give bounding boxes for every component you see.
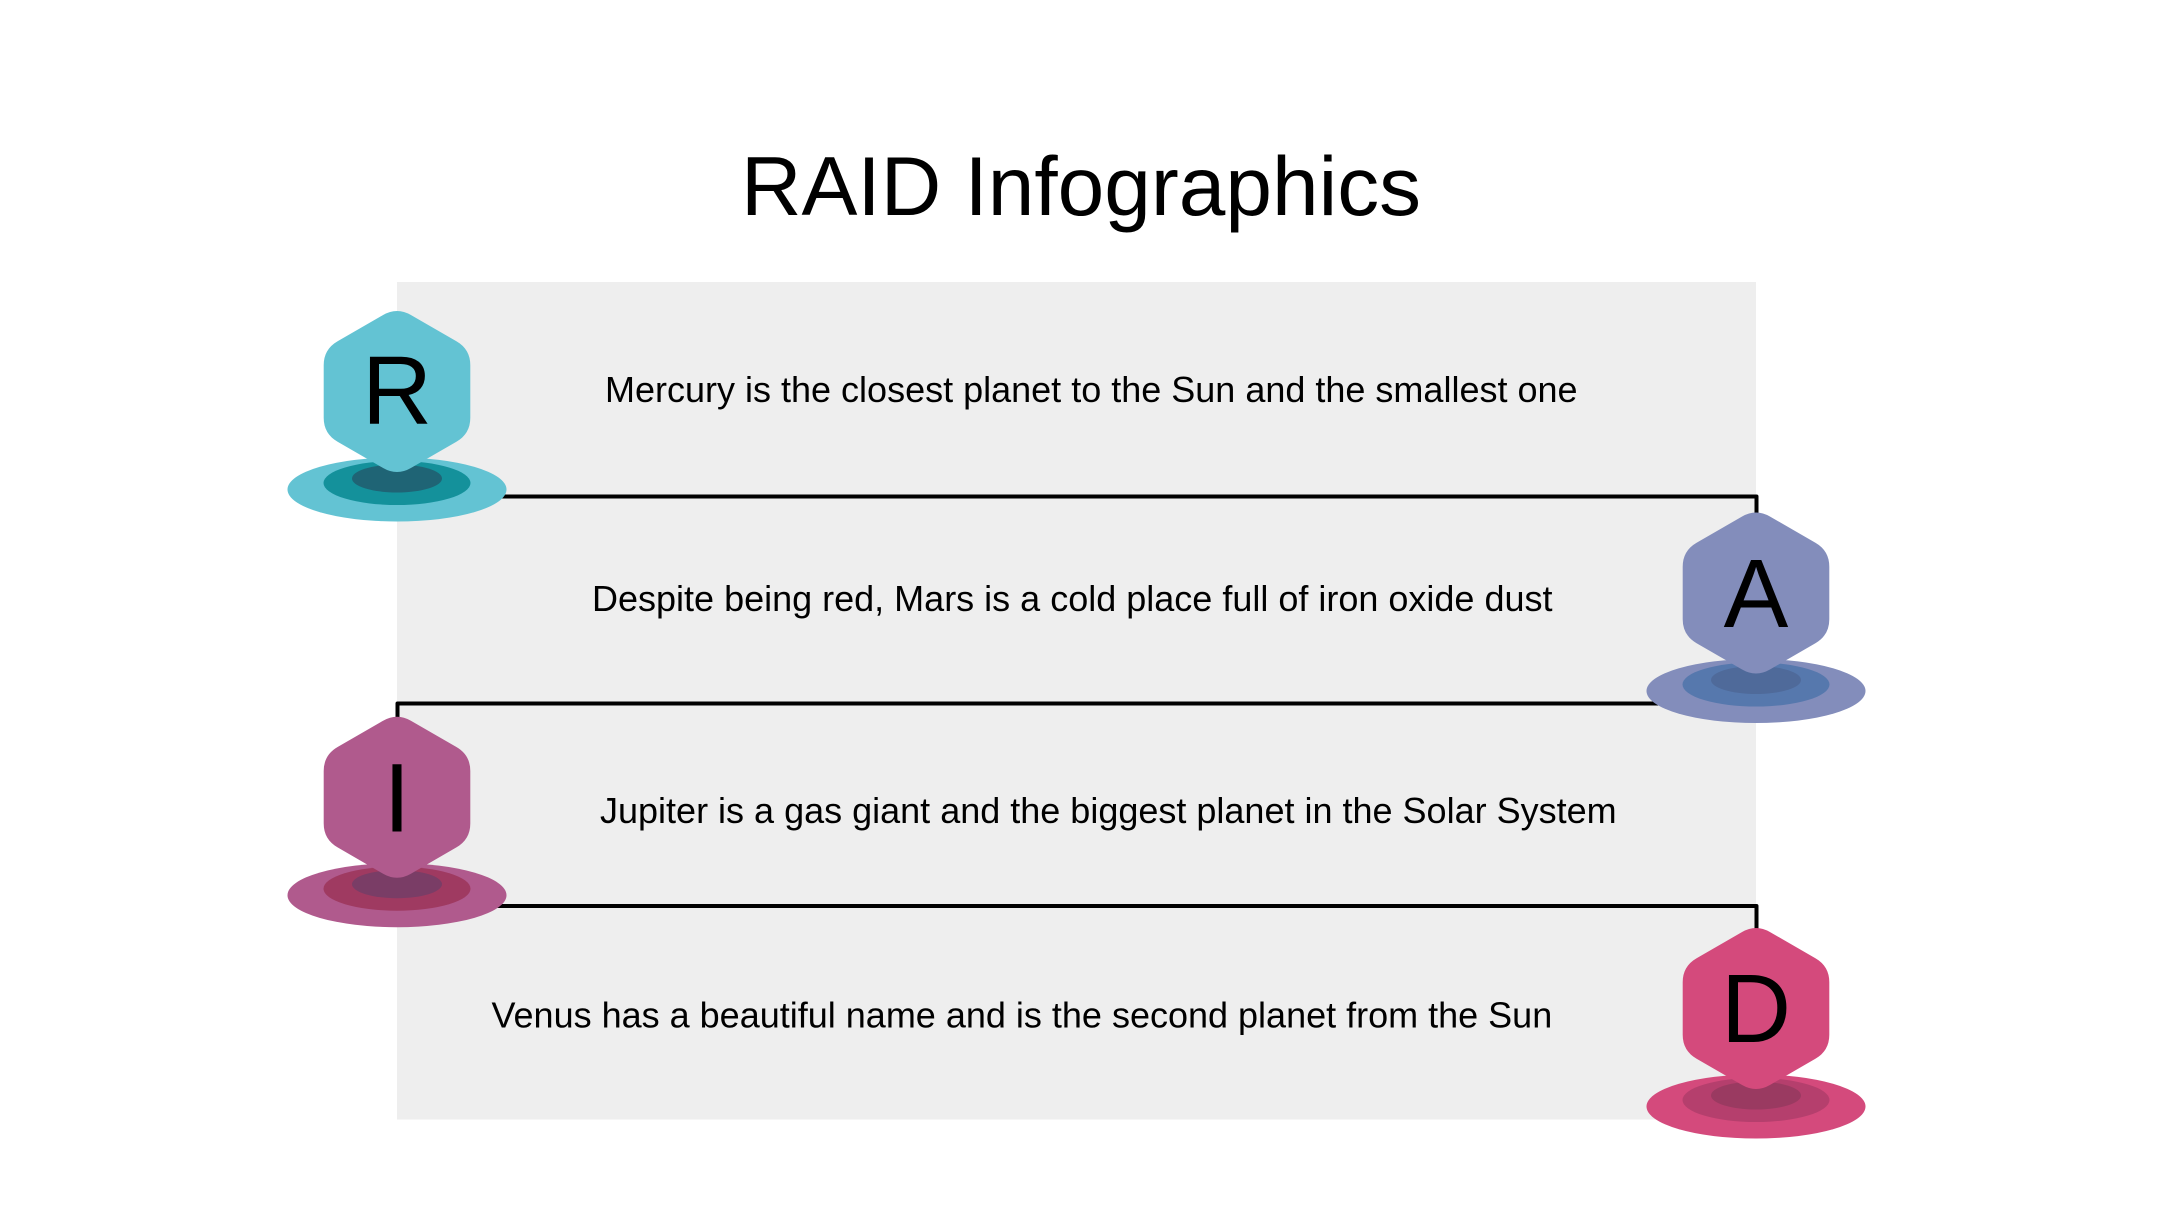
marker R — [288, 311, 506, 522]
marker D — [1646, 928, 1866, 1138]
marker I: I — [384, 743, 410, 852]
text block: Mars: Despite being red, Mars is a cold place full of iron oxide dust — [592, 578, 1553, 619]
marker D: D — [1721, 954, 1791, 1063]
marker A — [1646, 512, 1866, 723]
marker A: A — [1724, 539, 1789, 648]
title: RAID Infographics — [741, 139, 1421, 233]
marker R: R — [362, 336, 432, 445]
panel: background — [397, 282, 1756, 1120]
marker I — [288, 717, 506, 927]
connector lines — [398, 496, 1756, 940]
text block: Mercury: Mercury is the closest planet to the Sun and the smallest one — [605, 369, 1578, 410]
text block: Venus: Venus has a beautiful name and is the second planet from the Sun — [492, 994, 1552, 1036]
text block: Jupiter: Jupiter is a gas giant and the biggest planet in the Solar System — [600, 790, 1617, 831]
